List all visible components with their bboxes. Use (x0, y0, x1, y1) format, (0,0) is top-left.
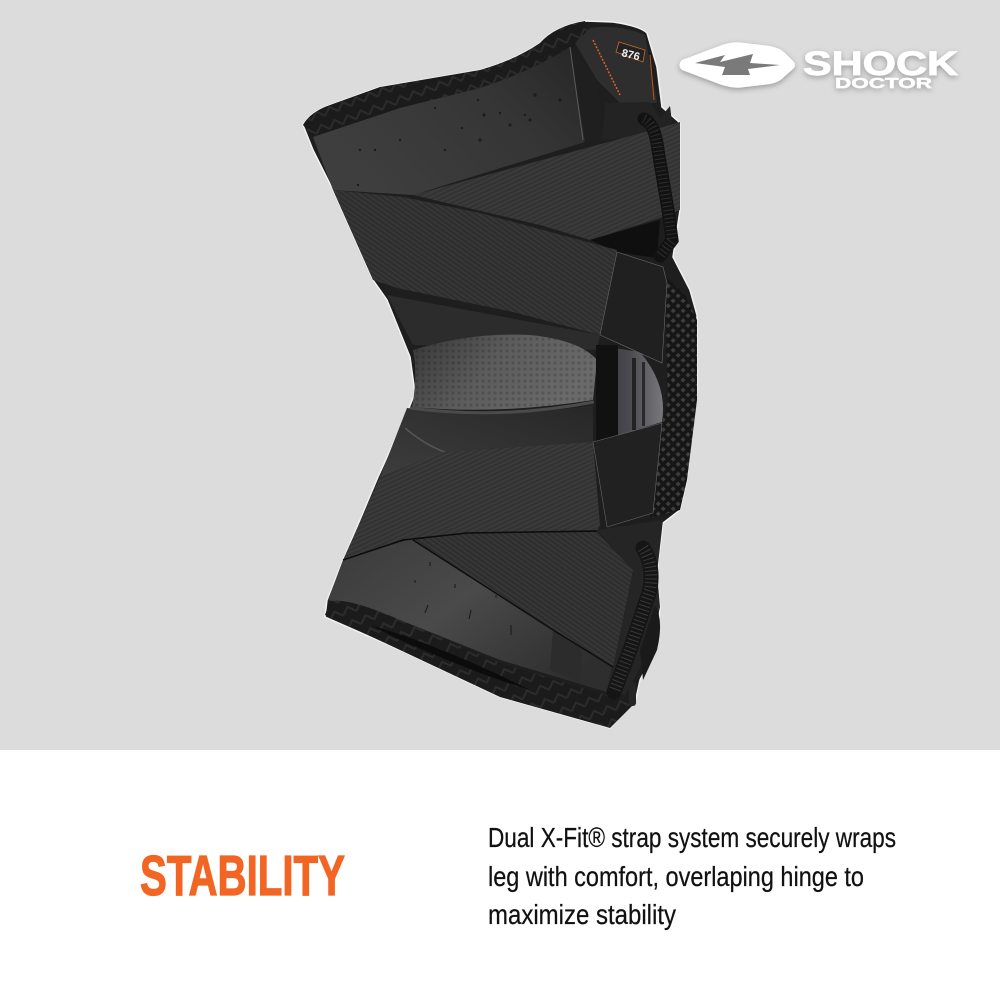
upper webbing ribs (644, 119, 672, 256)
lower diagonal strap edge (413, 540, 613, 667)
lower webbing strap (614, 548, 651, 692)
lower diagonal strap (413, 532, 633, 667)
lower panel side (597, 520, 663, 695)
lower webbing ribs (614, 548, 651, 692)
top mesh rim (303, 21, 590, 137)
body panel below straps (387, 295, 600, 350)
description text (488, 822, 896, 930)
lower panel (328, 538, 613, 692)
lower hinge bars (550, 628, 582, 682)
top side panel with orange stitching (570, 27, 657, 142)
hinge window (596, 345, 663, 442)
buckle pin (629, 682, 636, 706)
lower main strap edge (343, 531, 597, 560)
lower panel perforations (415, 562, 511, 635)
description line 3: maximize stability (488, 899, 676, 930)
description line 2: leg with comfort, overlaping hinge to (488, 861, 864, 892)
orange edge line (650, 55, 654, 100)
main upper strap (333, 190, 617, 335)
brand logo (680, 42, 959, 92)
lower velcro tab (593, 423, 662, 527)
knee opening: knit patch (412, 335, 597, 410)
logo wordmark: SHOCK (803, 45, 959, 83)
lower main strap (343, 442, 600, 560)
logo sub-wordmark: DOCTOR (835, 75, 932, 92)
upper velcro tab (600, 252, 667, 363)
upper cuff panel (313, 47, 585, 195)
black gap behind straps (590, 220, 660, 258)
background: grey product area (0, 0, 1000, 750)
inner black slit (370, 625, 530, 690)
brace silhouette (303, 21, 697, 728)
side mesh panel (650, 275, 697, 518)
cuff perforations (357, 93, 562, 186)
description line 1: Dual X-Fit® strap system securely wraps (488, 822, 896, 853)
upper strap (413, 122, 680, 240)
knee brace product illustration (303, 21, 697, 728)
heading: STABILITY (140, 844, 345, 908)
upper webbing loop (644, 119, 672, 256)
lower mesh rim (325, 601, 635, 728)
orange stitch line (593, 40, 620, 95)
mid panel below knee (380, 405, 593, 477)
logo emblem with lightning bolt (680, 42, 795, 88)
lower hinge cap (640, 605, 660, 680)
background: white caption area (0, 750, 1000, 1000)
mid panel highlight arc (405, 428, 447, 453)
buckle plate (602, 102, 672, 140)
model badge: 876 (620, 47, 641, 63)
knit border (410, 402, 594, 413)
